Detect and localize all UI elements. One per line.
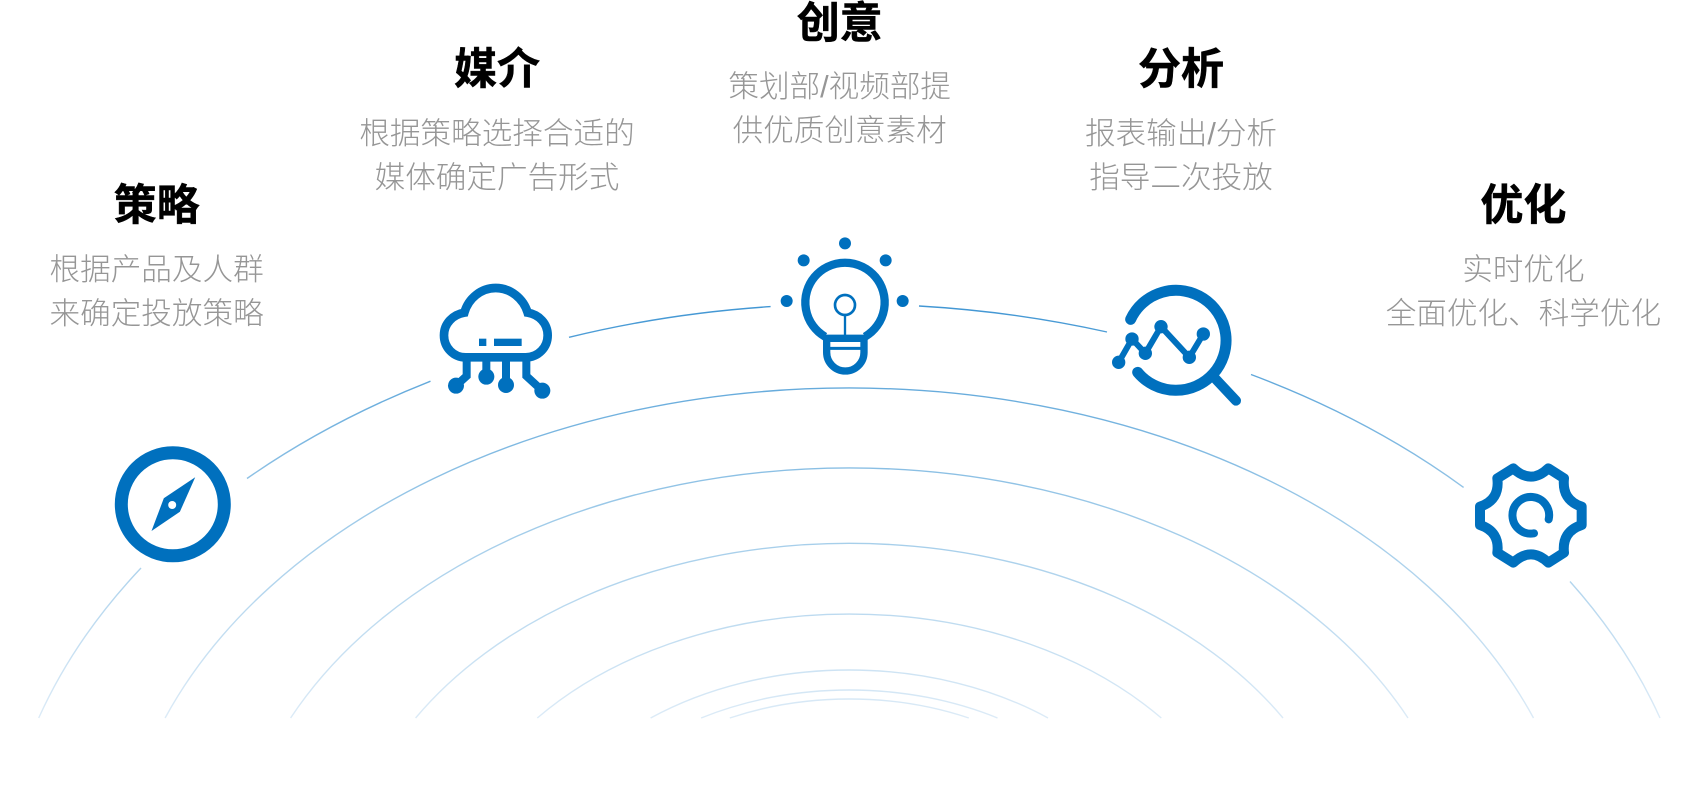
outer arc segments linking the icons xyxy=(39,306,1660,718)
heading: 策略: 策略 xyxy=(114,182,200,230)
text: 策略 description: 来确定投放策略 xyxy=(50,297,264,331)
icon: gear xyxy=(1480,468,1582,563)
text: 创意 description: 供优质创意素材 xyxy=(733,114,947,148)
icon: magnifier with line chart xyxy=(1112,290,1236,401)
heading: 优化: 优化 xyxy=(1480,182,1566,230)
text: 分析 description: 报表输出/分析 xyxy=(1085,117,1277,151)
icon: compass xyxy=(121,453,224,556)
text: 创意 description xyxy=(728,70,951,148)
text: 媒介 description: 媒体确定广告形式 xyxy=(375,161,619,195)
text: 优化 description xyxy=(1386,253,1661,331)
panel: 优化 xyxy=(1386,182,1661,331)
text: 创意 description: 策划部/视频部提 xyxy=(728,70,951,104)
text: 分析 description: 指导二次投放 xyxy=(1089,161,1273,195)
text: 媒介 description: 根据策略选择合适的 xyxy=(359,117,635,151)
concentric arcs xyxy=(165,388,1534,718)
panel: 策略 xyxy=(50,182,264,331)
panel: 分析 xyxy=(1085,46,1277,195)
text: 媒介 description xyxy=(359,117,635,195)
icon: cloud network xyxy=(444,288,550,399)
text: 优化 description: 实时优化 xyxy=(1462,253,1585,287)
heading: 分析: 分析 xyxy=(1138,46,1224,94)
panel: 媒介 xyxy=(359,46,635,195)
icon: light bulb xyxy=(781,237,909,371)
text: 优化 description: 全面优化、科学优化 xyxy=(1386,297,1661,331)
panel: 创意 xyxy=(728,0,951,148)
heading: 媒介: 媒介 xyxy=(454,46,540,94)
text: 分析 description xyxy=(1085,117,1277,195)
text: 策略 description: 根据产品及人群 xyxy=(50,253,264,287)
heading: 创意: 创意 xyxy=(797,0,883,48)
text: 策略 description xyxy=(50,253,264,331)
